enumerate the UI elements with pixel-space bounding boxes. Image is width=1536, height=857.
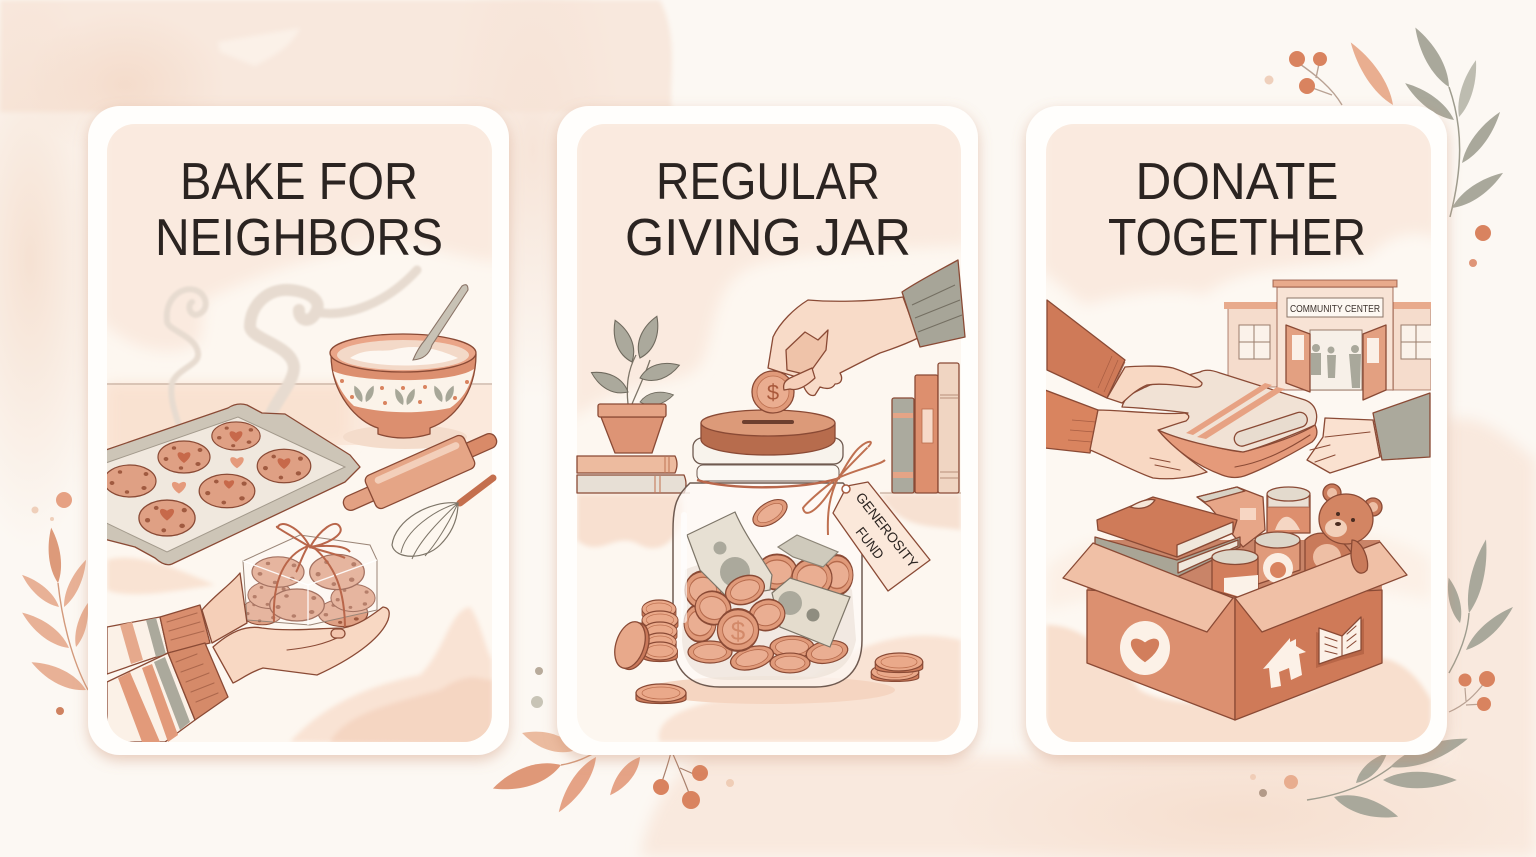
card frame xyxy=(1026,106,1447,755)
baking tray with cookies xyxy=(100,404,360,565)
rolling pin xyxy=(337,422,503,522)
heading: regular giving jar: REGULAR xyxy=(656,153,880,211)
decoration: bottom center sprig and berries xyxy=(490,667,734,816)
glass jar with coins and bills xyxy=(645,410,895,704)
mixing bowl and spoon xyxy=(330,285,476,449)
heading: donate together: DONATE xyxy=(1136,153,1338,211)
generosity fund tag with twine xyxy=(803,442,930,591)
icon: open book xyxy=(1316,617,1364,668)
cork lid xyxy=(701,410,835,455)
coins and bills inside jar xyxy=(682,512,856,680)
box flaps xyxy=(1063,543,1233,632)
donation box with contents xyxy=(1063,484,1407,720)
card frame xyxy=(557,106,978,755)
heading: regular giving jar: GIVING JAR xyxy=(625,209,911,267)
panel: regular giving jar xyxy=(557,106,978,755)
jar neck xyxy=(693,438,843,487)
box interior xyxy=(1087,540,1382,600)
community center sign: COMMUNITY CENTER xyxy=(1290,304,1380,315)
food cans xyxy=(1212,532,1300,598)
illustration wash xyxy=(1040,115,1440,745)
decoration: lower left leaf sprig xyxy=(18,492,92,715)
icon: house xyxy=(1263,638,1306,688)
community center building xyxy=(1224,280,1432,400)
whisk xyxy=(392,478,493,559)
heading: bake for neighbors: BAKE FOR xyxy=(180,153,418,211)
coin in hand: $ xyxy=(767,380,779,405)
panel: bake for neighbors xyxy=(88,106,509,755)
heading: bake for neighbors: NEIGHBORS xyxy=(155,209,443,267)
decoration: right side sprig and berries xyxy=(1444,538,1517,712)
heading: bake for neighbors xyxy=(155,153,443,267)
stacked books behind xyxy=(1197,487,1265,547)
decoration: bottom right sprig xyxy=(1250,731,1471,825)
hands passing folded blankets xyxy=(1045,300,1430,479)
heading: donate together: TOGETHER xyxy=(1108,209,1366,267)
panel: donate together xyxy=(1026,106,1447,755)
stacked books left xyxy=(577,456,686,493)
upright books right xyxy=(892,363,959,493)
coin stacks xyxy=(609,600,923,704)
giving hands and striped sleeves xyxy=(107,573,389,742)
decoration: top right leaves and berries xyxy=(1264,24,1507,267)
box faces xyxy=(1087,590,1235,720)
heading: regular giving jar xyxy=(625,153,911,267)
wrapped cookie gift xyxy=(241,524,377,630)
community center sign xyxy=(1287,298,1383,317)
card frame xyxy=(88,106,509,755)
coins and bills inside jar: $ xyxy=(731,616,746,646)
teddy bear xyxy=(1305,484,1382,585)
icon: heart badge xyxy=(1120,621,1170,675)
heading: donate together xyxy=(1108,153,1366,267)
illustration wash xyxy=(570,115,970,742)
coin in hand xyxy=(752,260,965,413)
potted plant xyxy=(588,313,682,453)
illustration wash xyxy=(100,115,500,745)
folded clothes and grey stack xyxy=(1095,497,1240,577)
generosity fund tag with twine: FUND xyxy=(853,524,887,562)
jar of preserves xyxy=(1267,487,1310,533)
generosity fund tag with twine: GENEROSITY xyxy=(853,489,922,571)
steam xyxy=(167,270,417,428)
bear arm over flap xyxy=(1351,540,1368,573)
